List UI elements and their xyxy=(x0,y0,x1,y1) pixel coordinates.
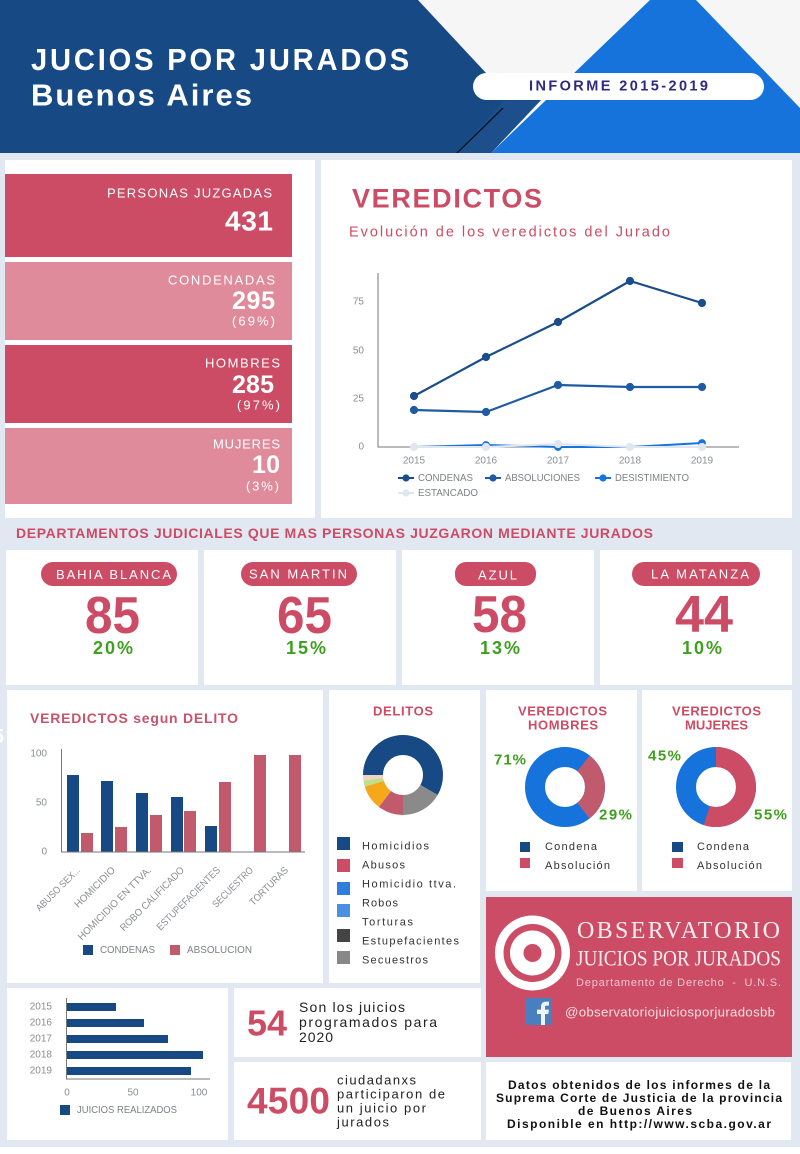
percentages: 71% xyxy=(494,752,526,768)
heading: VEREDICTOS xyxy=(352,184,542,214)
card: La Matanza: 10% xyxy=(682,638,722,658)
description: participaron de xyxy=(337,1086,445,1102)
icon: facebook xyxy=(526,998,552,1025)
stat: mujeres: MUJERES xyxy=(213,436,280,452)
donut chart xyxy=(535,757,595,817)
stat: condenadas: (69%) xyxy=(232,314,275,328)
description: jurados xyxy=(336,1114,390,1130)
panel: juicios programados xyxy=(234,988,481,1057)
title xyxy=(31,42,412,112)
bar chart xyxy=(30,748,305,956)
legend: CONDENAS xyxy=(100,944,155,956)
heading: DELITOS xyxy=(373,704,433,718)
stat: hombres: (97%) xyxy=(237,398,280,412)
heading: VEREDICTOS segun DELITO xyxy=(30,710,238,726)
bar chart: 2016 xyxy=(30,1018,52,1028)
percentages: 45% xyxy=(648,748,681,764)
line chart: 2015 xyxy=(403,456,426,466)
bar chart: 0 xyxy=(41,846,47,858)
legend: Homicidios xyxy=(362,840,430,852)
panel: data source note: Datos obtenidos de los informes de la xyxy=(508,1078,770,1092)
bar chart: 2018 xyxy=(30,1050,52,1060)
description: programados para xyxy=(299,1014,437,1030)
report period pill: INFORME 2015-2019 xyxy=(529,78,708,94)
legend: Robos xyxy=(362,898,398,910)
card: La Matanza: LA MATANZA xyxy=(651,566,749,582)
legend xyxy=(337,837,460,966)
legend: DESISTIMIENTO xyxy=(615,472,689,484)
description xyxy=(336,1072,445,1130)
title: Buenos Aires xyxy=(31,78,254,112)
panel: data source note: de Buenos Aires xyxy=(578,1104,692,1118)
legend: ABSOLUCIONES xyxy=(505,472,580,484)
card: Bahia Blanca: BAHIA BLANCA xyxy=(56,567,171,582)
legend: Absolución xyxy=(545,860,610,872)
card: Bahia Blanca xyxy=(6,550,198,685)
line chart: 2019 xyxy=(691,456,714,466)
logo wordmark: Departamento de Derecho - U.N.S. xyxy=(576,977,781,989)
card: San Martin: 65 xyxy=(277,587,332,645)
line chart xyxy=(353,273,739,499)
bar chart: ABUSO SEX... xyxy=(34,865,83,914)
line chart: 25 xyxy=(353,394,364,404)
stat: hombres: HOMBRES xyxy=(205,356,280,370)
header banner xyxy=(0,0,800,153)
line chart: 0 xyxy=(358,442,364,452)
panel: ciudadanxs xyxy=(234,1062,481,1140)
legend xyxy=(60,1105,70,1115)
panel: veredictos xyxy=(321,160,792,518)
panel: juicios realizados xyxy=(7,988,228,1140)
line chart: 50 xyxy=(353,346,364,356)
line chart: 75 xyxy=(353,296,364,308)
card: Azul xyxy=(402,550,594,685)
description: un juicio por xyxy=(337,1100,427,1116)
bar chart: TORTURAS xyxy=(248,865,291,908)
stat: condenadas: CONDENADAS xyxy=(168,272,275,288)
description: ciudadanxs xyxy=(337,1072,416,1088)
percentages: 29% xyxy=(599,806,632,824)
bar chart: HOMICIDIO EN TTVA. xyxy=(76,865,154,943)
stat: personas juzgadas: 431 xyxy=(225,206,273,236)
panel: veredictos hombres xyxy=(486,690,637,891)
description: Son los juicios xyxy=(299,999,405,1015)
legend: ESTANCADO xyxy=(418,487,478,499)
card: Azul: 13% xyxy=(480,638,520,658)
bar chart: ROBO CALIFICADO xyxy=(118,865,187,934)
bar chart: 50 xyxy=(36,798,47,808)
legend xyxy=(672,841,762,872)
stat: mujeres: 10 xyxy=(252,451,280,479)
legend: Homicidio ttva. xyxy=(362,878,456,890)
stat: mujeres: (3%) xyxy=(246,478,279,494)
legend xyxy=(520,841,610,872)
panel: delitos xyxy=(329,690,480,983)
logo wordmark xyxy=(576,918,781,989)
stat: hombres xyxy=(5,345,292,423)
card: La Matanza: 44 xyxy=(675,586,733,644)
panel: data source note: Disponible en http://www.scba.gov.ar xyxy=(507,1117,771,1131)
donut chart xyxy=(686,757,746,817)
bar chart: SECUESTRO xyxy=(211,865,256,910)
stat: personas juzgadas: PERSONAS JUZGADAS xyxy=(107,186,272,200)
description xyxy=(299,999,437,1045)
panel: observatorio logo block xyxy=(486,897,792,1057)
bar chart: JUICIOS REALIZADOS xyxy=(77,1104,177,1116)
card: San Martin: 15% xyxy=(286,638,326,658)
panel: veredictos segun delito xyxy=(7,690,323,983)
icon: target logo xyxy=(495,916,570,990)
card: Azul: 58 xyxy=(472,586,527,644)
bar chart: 0 xyxy=(64,1088,70,1098)
heading xyxy=(672,704,761,732)
legend: Estupefacientes xyxy=(362,936,460,948)
legend: Secuestros xyxy=(362,954,428,966)
stat: condenadas: 295 xyxy=(232,287,275,315)
stat: personas juzgadas xyxy=(5,174,292,257)
card: San Martin xyxy=(204,550,396,685)
legend: Condena xyxy=(545,841,598,853)
card: La Matanza xyxy=(600,550,792,685)
panel: veredictos mujeres xyxy=(642,690,792,891)
card: Bahia Blanca: 85 xyxy=(85,587,140,645)
legend: Torturas xyxy=(362,916,414,928)
bar chart: 2017 xyxy=(30,1034,52,1044)
bar chart xyxy=(30,998,210,1116)
percentages xyxy=(648,748,787,824)
logo wordmark: OBSERVATORIO xyxy=(577,918,780,944)
legend xyxy=(83,944,252,956)
social handle: @observatoriojuiciosporjuradosbb xyxy=(565,1004,775,1020)
panel: data source note: Suprema Corte de Justicia de la provincia xyxy=(496,1091,782,1105)
bar chart: 2019 xyxy=(30,1066,52,1076)
big number: 54 xyxy=(247,1002,287,1044)
bar chart: 50 xyxy=(127,1088,139,1098)
stat: mujeres xyxy=(5,428,292,504)
description: 2020 xyxy=(299,1029,333,1045)
panel: data source note xyxy=(486,1062,791,1140)
heading: departamentos: DEPARTAMENTOS JUDICIALES QUE MAS PERSONAS JUZGARON MEDIANTE JURADOS xyxy=(16,525,653,541)
big number: 4500 xyxy=(247,1080,330,1122)
report period pill xyxy=(473,73,764,100)
heading xyxy=(518,704,607,732)
bar chart: ESTUPEFACIENTES xyxy=(155,865,223,933)
donut chart xyxy=(373,745,433,805)
subheading: Evolución de los veredictos del Jurado xyxy=(349,224,670,240)
bar chart: HOMICIDIO xyxy=(73,865,118,910)
line chart: 2016 xyxy=(475,456,498,466)
legend: Absolución xyxy=(697,860,762,872)
legend xyxy=(398,472,689,499)
legend: Condena xyxy=(697,841,750,853)
heading: MUJERES xyxy=(685,718,748,732)
panel: totals xyxy=(5,160,315,518)
heading: HOMBRES xyxy=(528,718,598,732)
heading: VEREDICTOS xyxy=(518,704,607,718)
percentages: 55% xyxy=(754,806,787,824)
line chart: 2018 xyxy=(619,456,642,466)
heading: VEREDICTOS xyxy=(672,704,761,718)
card: Bahia Blanca: 20% xyxy=(93,638,133,658)
line chart: 2017 xyxy=(547,456,570,466)
stat: hombres: 285 xyxy=(232,371,274,399)
legend: CONDENAS xyxy=(418,472,473,484)
legend: ABSOLUCION xyxy=(187,944,252,956)
bar chart: 100 xyxy=(191,1088,208,1098)
stat: condenadas xyxy=(5,262,292,340)
title: JUCIOS POR JURADOS xyxy=(31,42,412,77)
percentages xyxy=(494,752,632,824)
card: Azul: AZUL xyxy=(478,568,517,582)
bar chart: 100 xyxy=(30,748,47,760)
bar chart: 2015 xyxy=(30,1002,52,1012)
card: San Martin: SAN MARTIN xyxy=(249,566,347,582)
legend: Abusos xyxy=(362,860,406,872)
